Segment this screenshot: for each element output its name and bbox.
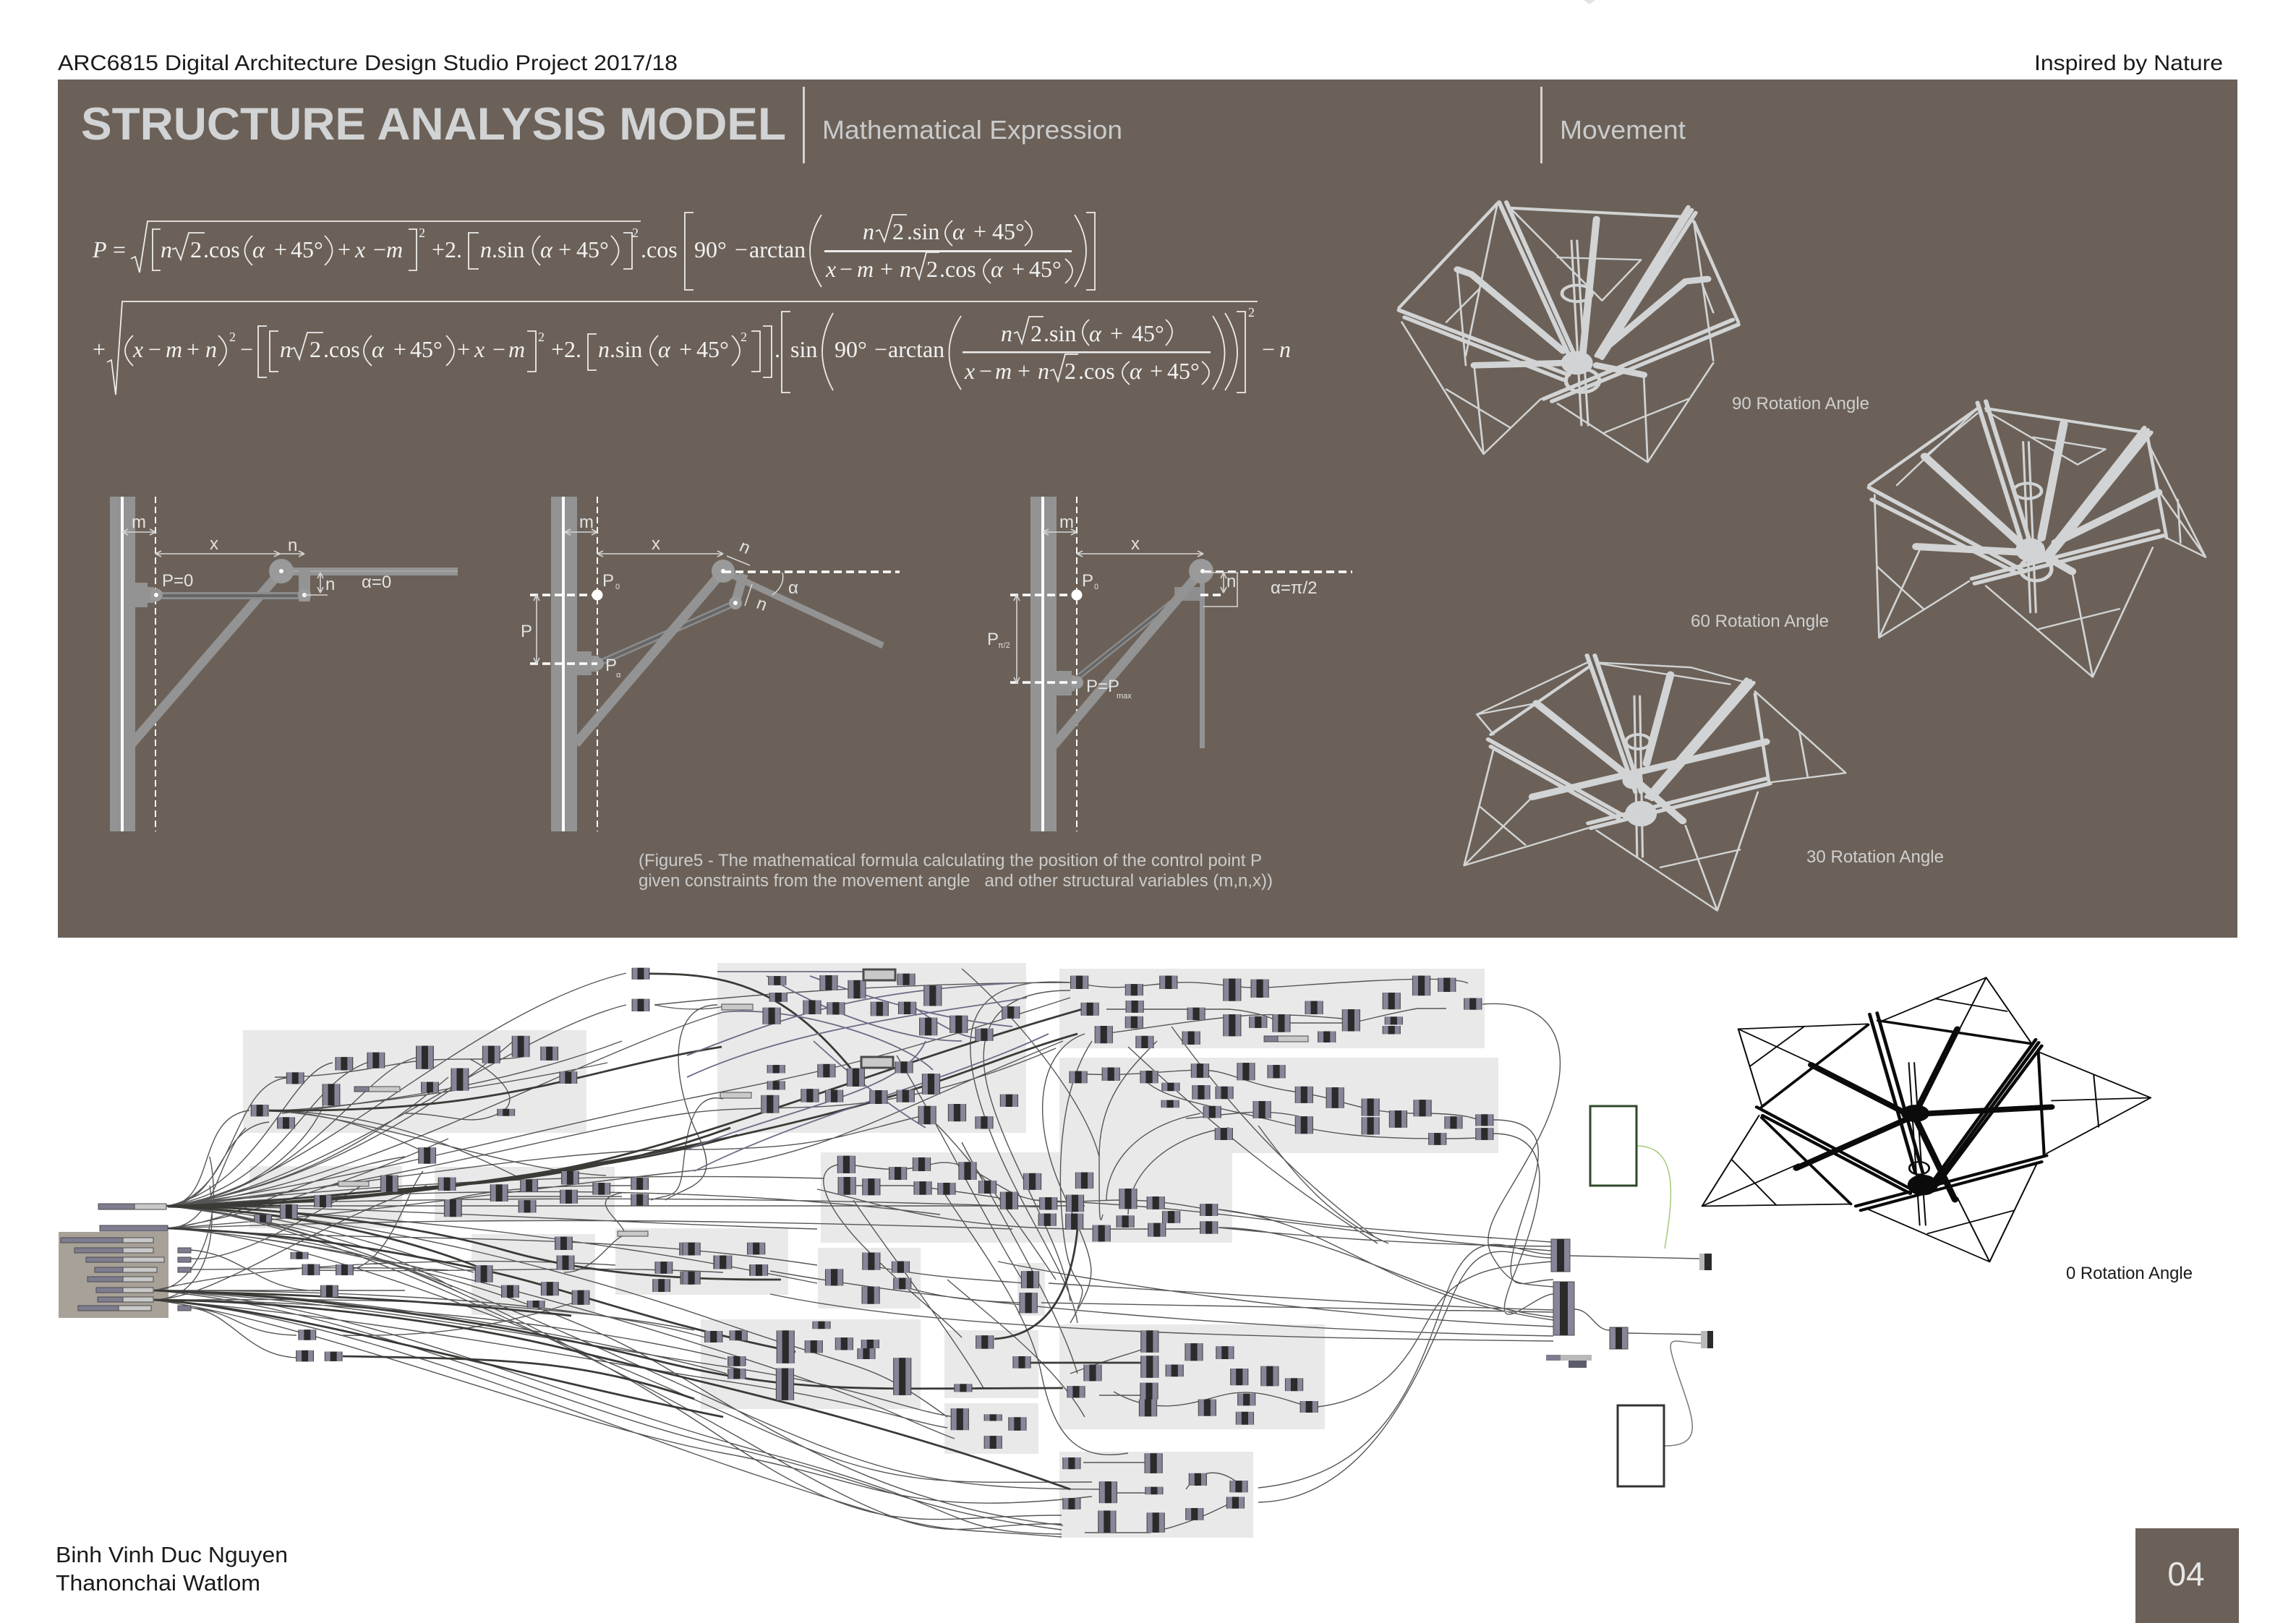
umbrella model: 0 rotation — [1702, 977, 2151, 1262]
formula: first line: +2. — [432, 236, 462, 262]
diagram: alpha zero: x — [210, 534, 218, 554]
formula: first line: α — [540, 236, 553, 262]
heading: mathematical expression: Mathematical Expression — [822, 115, 1122, 145]
formula: second line: 2 — [538, 330, 545, 344]
formula: second line: x — [964, 358, 975, 384]
formula: first line: .cos — [641, 236, 678, 262]
formula: second line: 45° — [1132, 320, 1164, 346]
formula: second line: 2 — [229, 330, 236, 344]
diagram: alpha pi over two: 0 — [1094, 583, 1098, 591]
formula: first line: 2 — [190, 236, 202, 262]
diagram: alpha pi over two: P — [1082, 571, 1093, 591]
diagram: alpha pi over two: x — [1131, 534, 1140, 554]
formula: first line: + — [973, 218, 986, 244]
formula: second line: α — [1130, 358, 1143, 384]
grasshopper wires: lavender highlights — [687, 972, 1049, 1171]
diagram: alpha intermediate: m — [579, 513, 594, 532]
formula: first line: 90° — [694, 236, 727, 262]
formula: second line: + — [1017, 358, 1030, 384]
formula: second line: m — [166, 336, 182, 362]
formula: first line: − — [840, 256, 853, 282]
formula: first line: n — [161, 236, 172, 262]
formula: first line: + — [338, 236, 351, 262]
formula: second line: .sin — [610, 336, 642, 362]
title: STRUCTURE ANALYSIS MODEL — [81, 99, 786, 150]
formula: first line: .sin — [907, 218, 939, 244]
authors — [56, 1542, 288, 1596]
diagram: alpha pi over two: n — [1226, 572, 1236, 591]
formula: first line: α — [952, 218, 965, 244]
diagram: alpha pi over two: max — [1117, 692, 1132, 701]
diagram: alpha pi over two — [987, 497, 1352, 831]
formula: second line: +2. — [551, 336, 581, 362]
formula: first line: m — [386, 236, 403, 262]
diagram: alpha pi over two: P — [987, 630, 999, 649]
formula: second line: − — [979, 358, 992, 384]
formula: first line — [92, 213, 1095, 290]
formula: first line: n — [863, 218, 874, 244]
authors: Binh Vinh Duc Nguyen — [56, 1542, 288, 1567]
diagram: alpha intermediate — [521, 497, 900, 831]
diagram: alpha zero: n — [288, 536, 297, 555]
formula: second line: 45° — [410, 336, 443, 362]
diagram: alpha zero: m — [132, 513, 146, 532]
formula: second line: n — [205, 336, 217, 362]
formula: first line: 2 — [926, 256, 938, 282]
formula: second line: α — [1089, 320, 1102, 346]
formula: first line: 2 — [419, 226, 425, 240]
diagram: alpha intermediate: n — [736, 536, 754, 558]
formula: second line: 2 — [1064, 358, 1076, 384]
formula: second line: − — [148, 336, 161, 362]
heading divider one — [803, 87, 805, 163]
formula: first line: 45° — [291, 236, 323, 262]
umbrella model: 30 rotation — [1464, 656, 1845, 910]
formula: second line: + — [457, 336, 470, 362]
formula: first line: + — [1012, 256, 1025, 282]
diagram: alpha intermediate: α — [788, 578, 798, 598]
merge nodes — [1546, 1239, 1713, 1368]
grasshopper nodes: right half — [691, 974, 1485, 1533]
grasshopper wires: heavy bundles — [154, 974, 1150, 1489]
formula: first line: .cos — [203, 236, 240, 262]
formula: first line: .cos — [939, 256, 976, 282]
formula: second line: arctan — [888, 336, 944, 362]
diagram: alpha zero: P=0 — [162, 571, 193, 591]
formula: first line: α — [252, 236, 265, 262]
formula: second line: 2 — [1248, 305, 1255, 320]
diagram: alpha intermediate: 0 — [615, 583, 620, 591]
umbrella model: 60 rotation — [1869, 401, 2206, 677]
formula: second line: + — [679, 336, 692, 362]
formula: first line: α — [991, 256, 1004, 282]
formula: second line: sin — [790, 336, 817, 362]
label: 30 rotation angle: 30 Rotation Angle — [1806, 847, 1944, 867]
formula: first line: + — [274, 236, 287, 262]
diagram: alpha zero: α=0 — [362, 573, 391, 592]
formula: first line: + — [880, 256, 893, 282]
formula: first line: arctan — [749, 236, 806, 262]
formula: second line: − — [1262, 336, 1275, 362]
grasshopper nodes: left half — [260, 968, 759, 1379]
umbrella model: 90 rotation — [1399, 202, 1738, 462]
diagram: alpha intermediate: α — [616, 671, 621, 680]
formula: second line: .sin — [1044, 320, 1076, 346]
node groups: grasshopper definition backgrounds — [243, 963, 1498, 1538]
diagram: alpha pi over two: π/2 — [998, 641, 1010, 650]
diagram: alpha intermediate: n — [754, 594, 769, 615]
figure caption: given constraints from the movement angle and other structural variables (m,n,x)) — [639, 871, 1273, 891]
formula: first line: 45° — [992, 218, 1025, 244]
source parameter block — [59, 1232, 168, 1318]
formula: second line: 2 — [1030, 320, 1042, 346]
formula: second line: − — [874, 336, 887, 362]
header: theme: Inspired by Nature — [2034, 51, 2223, 75]
formula: first line: 2 — [892, 218, 904, 244]
formula: first line: m — [857, 256, 874, 282]
formula: first line: x — [354, 236, 365, 262]
formula: second line: x — [474, 336, 485, 362]
formula: second line — [93, 301, 1291, 395]
formula: second line: + — [187, 336, 200, 362]
formula: second line: − — [240, 336, 253, 362]
formula: second line: n — [1038, 358, 1049, 384]
formula: second line: + — [393, 336, 406, 362]
panel: structure analysis background — [58, 80, 2237, 938]
formula: second line: x — [132, 336, 143, 362]
formula: second line: n — [1279, 336, 1291, 362]
formula: second line: 45° — [1167, 358, 1200, 384]
diagram: alpha zero: n — [325, 575, 335, 594]
panel: black output box — [1618, 1405, 1664, 1486]
formula: second line: − — [492, 336, 505, 362]
diagram: alpha intermediate: P — [605, 656, 617, 675]
formula: first line: P — [92, 236, 107, 262]
label: 60 rotation angle: 60 Rotation Angle — [1691, 612, 1829, 631]
page number: 04 — [2167, 1555, 2205, 1593]
figure caption: (Figure5 - The mathematical formula calculating the position of the control point P — [639, 851, 1262, 870]
formula: second line: n — [598, 336, 610, 362]
formula: second line: + — [1110, 320, 1123, 346]
formula: second line: 90° — [835, 336, 867, 362]
formula: first line: − — [735, 236, 748, 262]
formula: second line: α — [658, 336, 671, 362]
formula: second line: 2 — [741, 330, 747, 344]
formula: second line: + — [1150, 358, 1163, 384]
label: 0 rotation angle: 0 Rotation Angle — [2066, 1264, 2193, 1283]
page mark at top edge — [1584, 0, 1595, 4]
formula: first line: 45° — [576, 236, 609, 262]
header: course title: ARC6815 Digital Architecture Design Studio Project 2017/18 — [58, 51, 678, 75]
formula: second line: α — [372, 336, 385, 362]
diagram: alpha intermediate: P — [521, 622, 532, 641]
formula: second line: m — [995, 358, 1012, 384]
formula: first line: + — [558, 236, 571, 262]
page number box — [2135, 1528, 2239, 1623]
diagram: alpha zero — [110, 497, 458, 831]
heading divider two — [1540, 87, 1542, 163]
diagram: alpha intermediate: x — [652, 534, 660, 554]
formula: second line: 2 — [310, 336, 321, 362]
formula: first line: n — [480, 236, 492, 262]
figure caption — [639, 851, 1273, 891]
grasshopper wires: thin — [154, 969, 1701, 1537]
diagram: alpha pi over two: α=π/2 — [1271, 578, 1317, 598]
formula: second line: m — [508, 336, 525, 362]
formula: first line: n — [900, 256, 911, 282]
formula: second line: . — [774, 336, 780, 362]
label: 90 rotation angle: 90 Rotation Angle — [1732, 394, 1869, 414]
diagram: alpha pi over two: m — [1059, 513, 1074, 532]
formula: second line: n — [1001, 320, 1012, 346]
formula: second line: + — [93, 336, 106, 362]
formula: second line: .cos — [323, 336, 360, 362]
formula: first line: 2 — [632, 226, 639, 240]
panel output wires — [1636, 1146, 1701, 1446]
formula: first line: 45° — [1029, 256, 1062, 282]
formula: second line: 45° — [696, 336, 729, 362]
diagram: alpha intermediate: P — [602, 571, 614, 591]
formula: first line: .sin — [492, 236, 524, 262]
formula: first line: − — [373, 236, 386, 262]
formula: second line: n — [280, 336, 291, 362]
heading: movement: Movement — [1560, 115, 1686, 145]
formula: second line: .cos — [1078, 358, 1115, 384]
panel: green output box — [1590, 1106, 1636, 1186]
formula: first line: = — [113, 236, 126, 262]
authors: Thanonchai Watlom — [56, 1570, 260, 1596]
diagram: alpha pi over two: P=P — [1086, 677, 1119, 696]
formula: first line: x — [825, 256, 836, 282]
sliders: number inputs — [61, 969, 1308, 1311]
